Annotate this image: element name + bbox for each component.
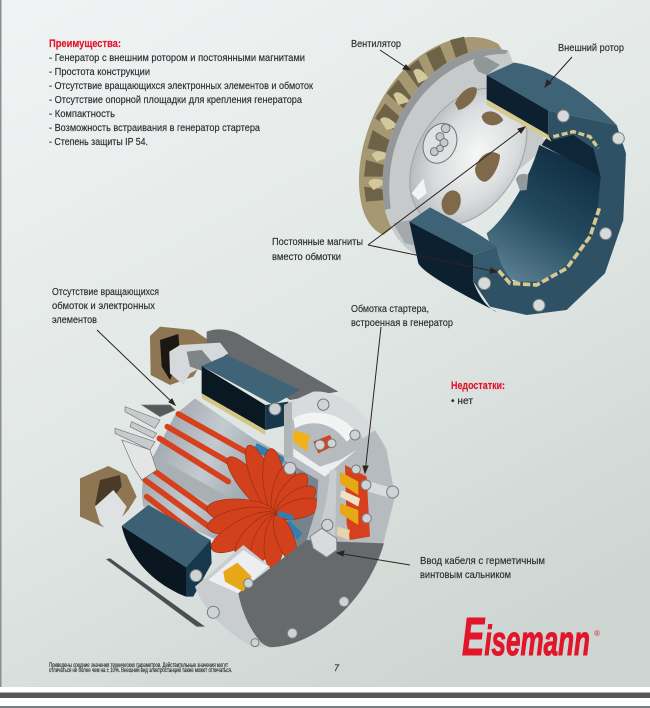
label: permanent magnets: вместо обмотки (272, 251, 341, 263)
label: starter winding: встроенная в генератор (351, 317, 453, 329)
shelf (542, 133, 605, 178)
logo: Eisemann: Eisemann (462, 606, 590, 667)
lower magnet block (409, 207, 513, 312)
label: no rotating windings: Отсутствие вращающихся (52, 286, 159, 298)
label: outer rotor: Внешний ротор (558, 42, 624, 54)
outer shell (207, 329, 338, 400)
text block: advantages: - Отсутствие вращающихся электронных элементов и обмоток (49, 80, 313, 92)
cable gland (310, 528, 337, 557)
label: cable gland: винтовым сальником (420, 569, 511, 581)
text block: advantages: - Отсутствие опорной площадки для крепления генератора (49, 94, 302, 106)
arrow: starter winding (363, 327, 381, 473)
upper block (202, 355, 300, 435)
illustration: outer rotor (359, 37, 626, 315)
label: cable gland (420, 555, 545, 581)
copper winding (145, 414, 248, 547)
arrow: outer rotor (545, 57, 572, 87)
starter windings (293, 430, 370, 540)
text block: advantages (49, 38, 313, 148)
rear bracket (169, 343, 228, 385)
lower block (122, 505, 212, 597)
text block: disadvantages (451, 380, 505, 407)
label: fan: Вентилятор (351, 38, 401, 50)
lower shell strip (106, 558, 205, 627)
footnote (49, 662, 232, 674)
wheel disc (386, 67, 551, 247)
illustration: stator (80, 327, 399, 647)
hub bolts (417, 118, 463, 169)
footnote: отличаться не более чем на ± 10%. Внешний вид электростанций также может отличаться. (49, 667, 232, 674)
copper star (206, 441, 324, 569)
front frame (284, 392, 395, 543)
arrows (97, 50, 572, 565)
text block: advantages: - Генератор с внешним ротором и постоянными магнитами (49, 52, 305, 64)
footnote: Приведены средние значения технических параметров. Действительные значения могут (49, 662, 228, 669)
magnet strips (499, 208, 599, 285)
text block: advantages: - Возможность встраивания в генератор стартера (49, 122, 260, 134)
text block: advantages: - Компактность (49, 108, 115, 120)
upper magnet block (473, 63, 626, 315)
arrow: magnets upper (368, 127, 525, 245)
text block: advantages: - Степень защиты IP 54. (49, 136, 148, 148)
heading: advantages: Преимущества: (49, 38, 121, 50)
logo: Eisemann: ® (594, 629, 600, 638)
inner wall (487, 145, 607, 287)
label: cable gland: Ввод кабеля с герметичным (420, 555, 545, 567)
label: starter winding: Обмотка стартера, (351, 303, 429, 315)
bottom frame (0, 687, 650, 708)
rear fan (150, 327, 213, 385)
fan (359, 37, 507, 235)
arrow: no rotating windings (97, 330, 175, 405)
text block: advantages: - Простота конструкции (49, 66, 150, 78)
arrow: magnets lower (368, 245, 497, 273)
stator core (142, 398, 322, 555)
center wire (278, 513, 293, 518)
lower frame (195, 545, 270, 647)
dark end cover (237, 540, 384, 647)
label: no rotating windings (52, 286, 159, 326)
blue wires (255, 447, 307, 567)
ring plate (383, 49, 547, 255)
spacer pins (473, 56, 500, 75)
text block: disadvantages: Недостатки: (451, 380, 505, 392)
label: starter winding (351, 303, 453, 329)
disc holes (412, 87, 503, 215)
front fan (80, 466, 137, 530)
label: permanent magnets (272, 236, 363, 263)
label: no rotating windings: обмоток и электронных (52, 300, 156, 312)
terminals (115, 405, 175, 480)
label: no rotating windings: элементов (52, 314, 97, 326)
arrow: fan (380, 50, 410, 70)
rotor bolts (478, 110, 624, 311)
label: permanent magnets: Постоянные магниты (272, 236, 363, 248)
stator bolts (190, 399, 399, 647)
text block: disadvantages: • нет (451, 395, 473, 407)
arrow: cable gland (337, 551, 410, 565)
page number: 7 (334, 663, 340, 673)
